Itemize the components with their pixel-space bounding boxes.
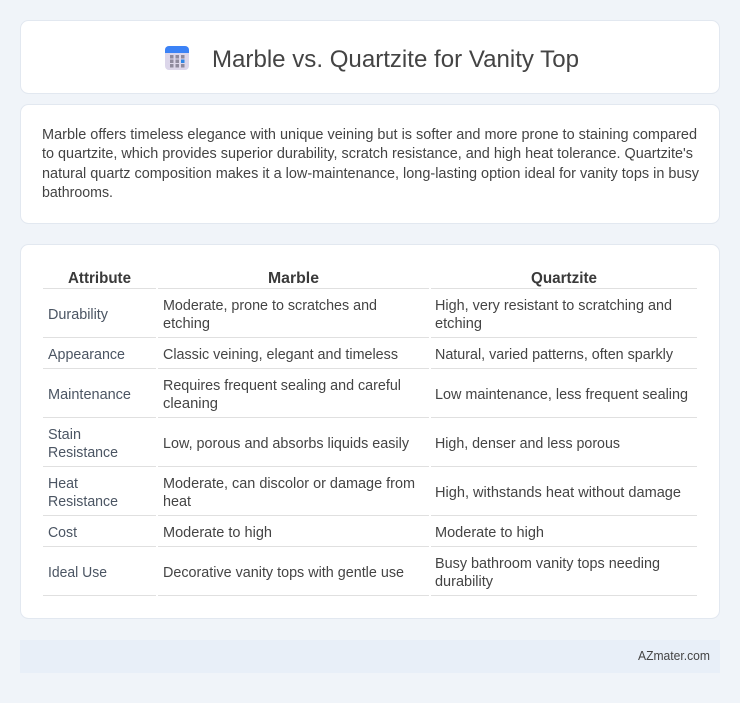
row: ideal use	[48, 556, 660, 590]
row: stain resistance: Stain	[48, 427, 81, 443]
row: appearance: Appearance	[48, 347, 125, 363]
row: heat resistance: Moderate, can discolor or damage from	[163, 476, 415, 492]
row: stain resistance	[48, 427, 620, 461]
footer	[20, 640, 720, 673]
row: appearance: Natural, varied patterns, often sparkly	[435, 347, 674, 363]
row: heat resistance: High, withstands heat without damage	[435, 485, 681, 501]
text block: summary: natural quartz composition makes it a low-maintenance, long-lasting option ideal for vanity tops in busy	[42, 166, 700, 182]
row: durability: High, very resistant to scratching and	[435, 298, 672, 314]
panel: comparison table	[20, 244, 720, 618]
title: Marble vs. Quartzite for Vanity Top	[212, 46, 579, 73]
row: ideal use: durability	[435, 574, 494, 590]
row: durability: Moderate, prone to scratches and	[163, 298, 377, 314]
row: heat resistance: heat	[163, 494, 191, 510]
text block: summary: to quartzite, which provides superior durability, scratch resistance, and high heat tolerance. Quartzite's	[42, 146, 693, 162]
table header: Attribute	[68, 270, 131, 287]
panel: description	[20, 104, 720, 224]
row: maintenance: Requires frequent sealing and careful	[163, 378, 401, 394]
row: stain resistance: Low, porous and absorbs liquids easily	[163, 436, 410, 452]
text block: summary: Marble offers timeless elegance with unique veining but is softer and more prone to staining compared	[42, 127, 697, 143]
row: durability: etching	[163, 316, 210, 332]
row: maintenance	[48, 378, 688, 412]
icon: calendar	[165, 46, 189, 70]
row: maintenance: cleaning	[163, 396, 218, 412]
row: stain resistance: Resistance	[48, 445, 118, 461]
text block: summary	[42, 127, 700, 201]
row: durability: etching	[435, 316, 482, 332]
table header: Quartzite	[531, 270, 597, 287]
row: cost: Moderate to high	[163, 525, 272, 541]
row: cost: Moderate to high	[435, 525, 544, 541]
row: cost	[48, 525, 544, 541]
row: maintenance: Low maintenance, less frequent sealing	[435, 387, 688, 403]
table header: Marble	[268, 270, 319, 287]
panel: title card	[20, 20, 720, 94]
footer credit: AZmater.com	[638, 649, 710, 663]
row: heat resistance	[48, 476, 681, 510]
row: durability	[48, 298, 672, 332]
row: heat resistance: Resistance	[48, 494, 118, 510]
row: appearance: Classic veining, elegant and timeless	[163, 347, 398, 363]
row: stain resistance: High, denser and less porous	[435, 436, 620, 452]
row: ideal use: Decorative vanity tops with gentle use	[163, 565, 404, 581]
row: heat resistance: Heat	[48, 476, 78, 492]
table header	[68, 270, 597, 287]
row: cost: Cost	[48, 525, 77, 541]
row: maintenance: Maintenance	[48, 387, 131, 403]
text block: summary: bathrooms.	[42, 185, 113, 201]
row: appearance	[48, 347, 674, 363]
row: ideal use: Busy bathroom vanity tops needing	[435, 556, 660, 572]
row: ideal use: Ideal Use	[48, 565, 107, 581]
row: durability: Durability	[48, 307, 109, 323]
